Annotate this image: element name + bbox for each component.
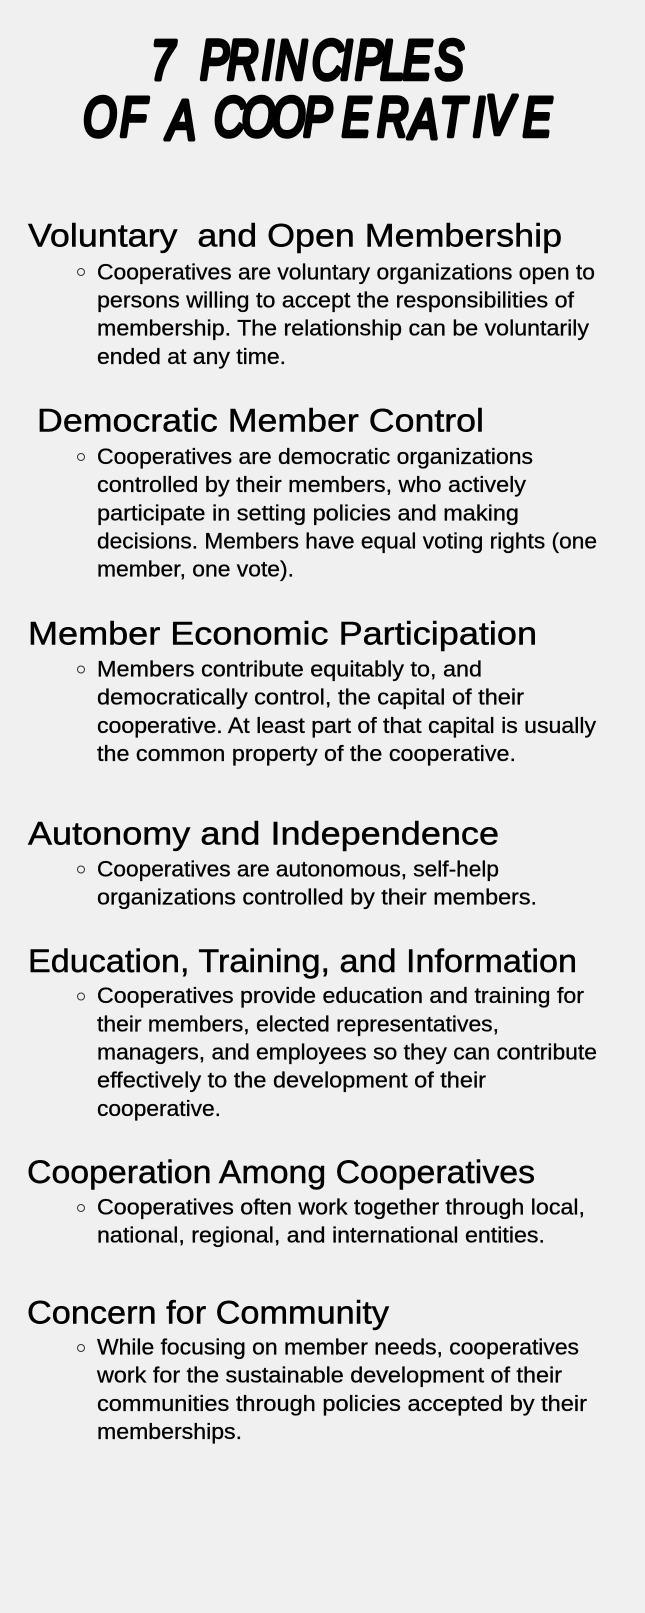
heading: Education, Training, and Information xyxy=(28,943,577,979)
text block: Cooperatives are democratic organizations xyxy=(97,444,533,469)
text block: Cooperatives provide education and training for xyxy=(97,983,584,1008)
text block: national, regional, and international entities. xyxy=(97,1223,545,1248)
text block xyxy=(97,856,537,910)
panel: voluntary and open membership xyxy=(28,218,595,369)
bullet xyxy=(78,993,84,1000)
heading: Democratic Member Control xyxy=(37,402,484,438)
heading: Member Economic Participation xyxy=(28,616,537,652)
text block: democratically control, the capital of their xyxy=(97,685,524,710)
text block: cooperative. At least part of that capital is usually xyxy=(97,713,596,738)
text block: ended at any time. xyxy=(97,344,286,369)
text block: communities through policies accepted by their xyxy=(97,1391,587,1416)
text block: member, one vote). xyxy=(97,556,294,582)
text block: their members, elected representatives, xyxy=(97,1012,499,1036)
text block: Cooperatives often work together through local, xyxy=(97,1194,585,1220)
heading: Voluntary and Open Membership xyxy=(28,218,562,254)
panel: member economic participation xyxy=(28,616,596,766)
text block: managers, and employees so they can contribute xyxy=(97,1040,597,1064)
text block xyxy=(96,1334,587,1444)
bullet xyxy=(78,666,84,673)
heading: Autonomy and Independence xyxy=(28,816,499,852)
title xyxy=(83,29,552,151)
heading: Cooperation Among Cooperatives xyxy=(27,1154,535,1190)
bullet xyxy=(78,454,84,460)
text block: participate in setting policies and making xyxy=(97,500,519,526)
panel: education, training, and information xyxy=(28,943,597,1121)
text block: While focusing on member needs, cooperatives xyxy=(97,1334,579,1360)
bullet xyxy=(78,268,84,276)
bullet xyxy=(78,1344,84,1352)
heading: Concern for Community xyxy=(27,1295,389,1331)
text block xyxy=(97,260,595,369)
text block xyxy=(97,1194,585,1248)
title: 7 PRINCIPLES xyxy=(151,29,464,91)
bullet xyxy=(78,1204,84,1212)
text block xyxy=(97,656,596,766)
panel: concern for community xyxy=(27,1295,587,1444)
text block: membership. The relationship can be voluntarily xyxy=(97,316,589,340)
panel: cooperation among cooperatives xyxy=(27,1154,585,1248)
text block: organizations controlled by their members. xyxy=(97,884,537,910)
bullet xyxy=(78,866,84,873)
text block: cooperative. xyxy=(97,1096,221,1121)
title: OF A COOPERATIVE xyxy=(83,84,552,151)
text block: Cooperatives are voluntary organizations open to xyxy=(97,260,595,284)
text block: persons willing to accept the responsibilities of xyxy=(97,288,575,312)
panel: democratic member control xyxy=(37,402,597,582)
text block: memberships. xyxy=(97,1419,242,1444)
text block: decisions. Members have equal voting rights (one xyxy=(97,528,597,554)
panel: autonomy and independence xyxy=(28,816,537,910)
text block: work for the sustainable development of their xyxy=(96,1363,562,1388)
text block xyxy=(97,983,597,1121)
text block: Members contribute equitably to, and xyxy=(97,656,482,682)
text block: the common property of the cooperative. xyxy=(97,741,516,766)
text block: controlled by their members, who actively xyxy=(97,472,526,497)
text block xyxy=(97,444,597,582)
text block: effectively to the development of their xyxy=(97,1068,486,1092)
text block: Cooperatives are autonomous, self-help xyxy=(97,856,499,882)
